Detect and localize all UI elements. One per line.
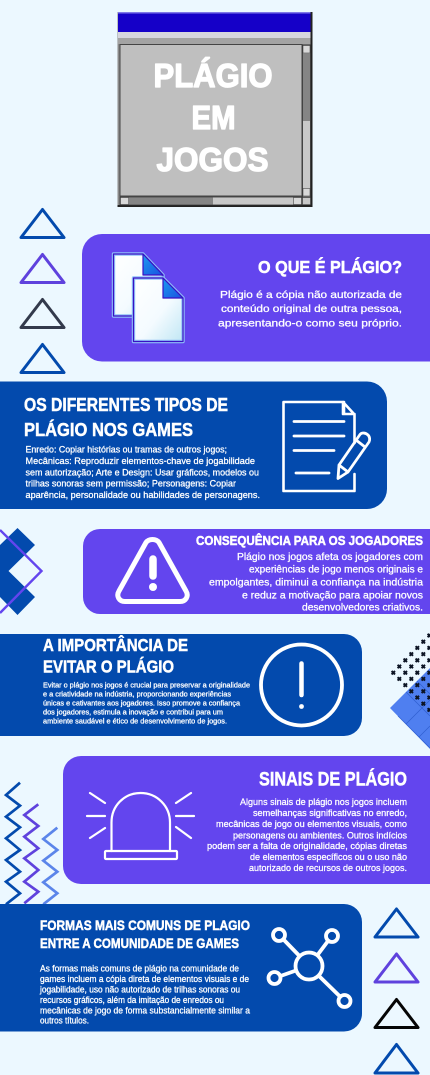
body text [207, 797, 407, 874]
right triangles decoration [375, 909, 418, 1073]
decoration: checkered diamond [0, 528, 42, 615]
window title bar [118, 13, 311, 32]
body text: ambiente saudável e ético de desenvolvimento de jogos. [43, 717, 227, 726]
body text: Plágio nos jogos afeta os jogadores com [237, 551, 423, 563]
body text: recursos gráficos, além da imitação de enredos ou [40, 995, 224, 1005]
body text: Enredo: Copiar histórias ou tramas de outros jogos; [26, 444, 227, 455]
decoration: zigzag lines [6, 783, 57, 904]
body text: Plágio é a cópia não autorizada de [220, 289, 402, 301]
body text: e reduz a motivação para apoiar novos [242, 589, 423, 601]
body text: Mecânicas: Reproduzir elementos-chave de jogabilidade [26, 456, 255, 467]
heading: ENTRE A COMUNIDADE DE GAMES [40, 935, 239, 951]
body text: As formas mais comuns de plágio na comunidade de [40, 964, 239, 974]
body text [43, 681, 250, 726]
decoration: blue diamond with crosses [390, 634, 430, 749]
heading: OS DIFERENTES TIPOS DE [24, 394, 228, 415]
body text: mecânicas de jogo ou elementos visuais, como [216, 819, 407, 830]
body text: de elementos específicos ou o uso não [250, 852, 407, 863]
main title: JOGOS [156, 141, 268, 178]
icon: network nodes [268, 929, 350, 1007]
heading [24, 394, 228, 440]
body text: aparência, personalidade ou habilidades de personagens. [26, 490, 260, 501]
main title: EM [192, 99, 236, 136]
horizontal scrollbar [120, 197, 310, 205]
vertical scrollbar [302, 45, 310, 197]
body text: conteúdo original de outra pessoa, [221, 303, 402, 315]
panel: importância de evitar o plágio [0, 634, 362, 736]
body text: Alguns sinais de plágio nos jogos incluem [240, 797, 407, 808]
heading: PLÁGIO NOS GAMES [24, 419, 193, 440]
main title [154, 57, 272, 178]
icon: siren [87, 793, 194, 859]
body text: personagens ou ambientes. Outros indícios [233, 830, 407, 841]
icon: copied documents [114, 254, 183, 342]
heading: EVITAR O PLÁGIO [43, 655, 174, 676]
panel: sinais de plágio [63, 756, 430, 884]
heading: A IMPORTÂNCIA DE [43, 634, 188, 655]
body text [218, 289, 402, 330]
title window [118, 12, 312, 207]
body text [39, 964, 250, 1025]
body text: sem autorização; Arte e Design: Usar gráficos, modelos ou [26, 468, 259, 478]
heading [43, 634, 188, 676]
body text: trilhas sonoras sem permissão; Personagens: Copiar [26, 479, 236, 490]
heading: FORMAS MAIS COMUNS DE PLAGIO [40, 917, 250, 933]
body text: experiências de jogo menos originais e [249, 564, 423, 576]
panel: consequência para os jogadores [83, 529, 430, 614]
body text: autorizado de recursos de outros jogos. [249, 863, 407, 874]
body text: mecânicas de jogo de forma substancialmente similar a [40, 1005, 250, 1015]
icon: exclamation circle [261, 644, 342, 726]
body text: e a criatividade na indústria, proporcionando experiências [43, 690, 231, 699]
body text: únicas e cativantes aos jogadores. Isso promove a confiança [43, 699, 241, 708]
body text: dos jogadores, estimula a inovação e contribui para um [43, 708, 223, 717]
body text: jogabilidade, uso não autorizado de trilhas sonoras ou [39, 984, 240, 994]
body text: Evitar o plágio nos jogos é crucial para preservar a originalidade [43, 681, 250, 690]
body text: games incluem a cópia direta de elementos visuais e de [40, 974, 249, 984]
heading: O QUE É PLÁGIO? [258, 256, 402, 277]
icon: document and pencil [284, 402, 370, 491]
panel: tipos de plágio [0, 382, 387, 509]
icon: warning triangle [118, 540, 187, 602]
body text: desenvolvedores criativos. [302, 602, 423, 614]
body text: semelhanças significativas no enredo, [253, 808, 407, 819]
panel: formas mais comuns [0, 904, 362, 1032]
body text: empolgantes, diminui a confiança na indústria [209, 576, 423, 588]
left triangles decoration [21, 210, 64, 372]
window content area [120, 44, 302, 196]
body text [209, 551, 423, 614]
body text: apresentando-o como seu próprio. [218, 318, 402, 330]
panel: o que é plágio [82, 234, 430, 362]
main title: PLÁGIO [154, 57, 272, 94]
body text: outros títulos. [40, 1015, 89, 1025]
body text [26, 444, 260, 501]
heading [40, 917, 250, 951]
body text: podem ser a falta de originalidade, cópias diretas [207, 841, 407, 852]
